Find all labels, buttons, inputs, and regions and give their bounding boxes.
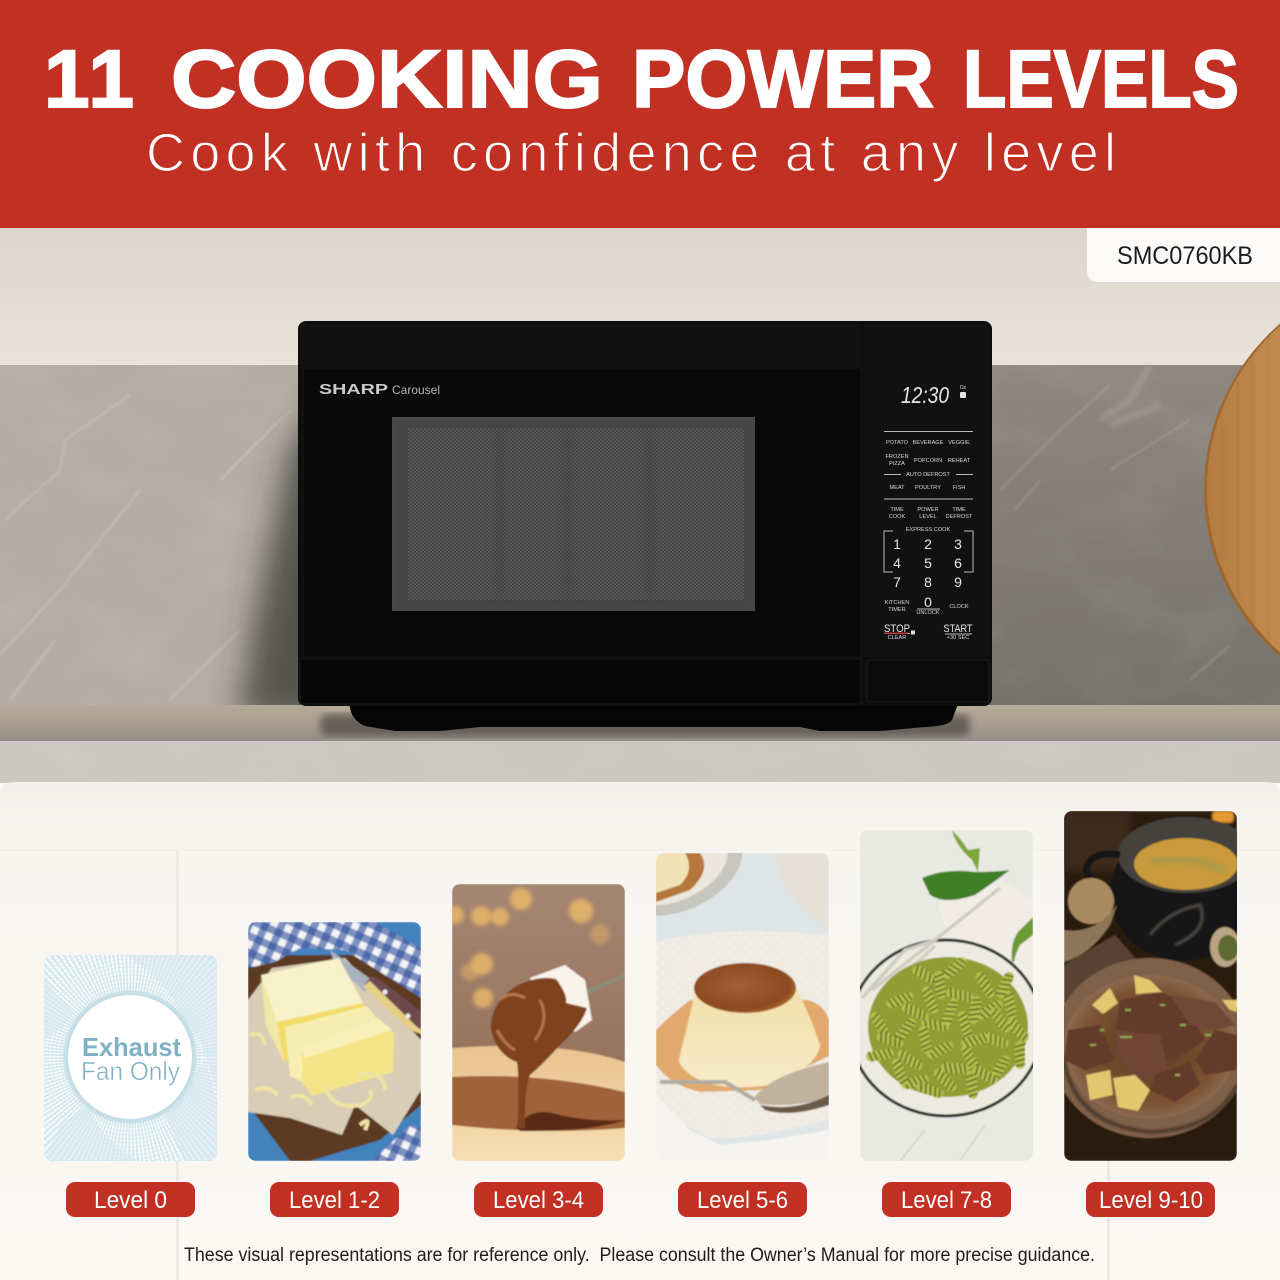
keypad labels: FISH [953, 485, 965, 491]
microwave [298, 321, 992, 731]
title: POWER [632, 34, 934, 125]
microwave shadow on counter [320, 714, 970, 736]
title: LEVELS [963, 34, 1239, 125]
keypad labels: TIMER [888, 607, 906, 613]
lock icon [911, 630, 915, 634]
white cloth [656, 1095, 829, 1161]
keypad labels: POULTRY [915, 485, 941, 491]
butter slice front [302, 1018, 394, 1096]
upper right plate [775, 853, 829, 928]
door window [392, 417, 755, 611]
title [44, 34, 1239, 125]
spoon [660, 1062, 829, 1113]
label: level 7-8 [882, 1182, 1011, 1217]
counter top surface [0, 705, 1280, 742]
flan body [679, 985, 820, 1087]
keypad labels [885, 440, 973, 641]
title: COOKING [171, 34, 603, 125]
plate rim shading [1064, 1060, 1237, 1132]
pot [1086, 817, 1254, 961]
side plate and small flan [656, 853, 742, 916]
keypad labels: FROZEN [886, 454, 908, 460]
wood board [248, 955, 421, 1161]
display indicator [960, 392, 966, 398]
express cook bracket [884, 531, 973, 572]
butter shavings [250, 1034, 385, 1130]
butter slice middle [285, 1006, 378, 1082]
SHARP logo: SHARP [319, 381, 388, 398]
number keys: 6 [954, 555, 962, 571]
number keys: 7 [893, 574, 901, 590]
keypad labels: LEVEL [919, 514, 937, 520]
gingham towel [248, 922, 421, 998]
keypad labels: POPCORN [914, 458, 942, 464]
basil leaves [922, 830, 1033, 962]
microwave shadow on backsplash [219, 396, 302, 705]
card: butter [248, 922, 421, 1161]
flame glow [1212, 811, 1234, 823]
disclaimer: These visual representations are for reference only. Please consult the Owner’s Manual for more precise guidance. [184, 1245, 1095, 1266]
top strip [300, 323, 861, 366]
number keys [893, 536, 962, 610]
brick backdrop [1064, 811, 1130, 870]
plain swirl patches [44, 955, 217, 1161]
stop underline [884, 632, 908, 634]
fork [862, 888, 1000, 998]
header banner [0, 0, 1280, 228]
start key: START [944, 623, 973, 635]
label: level 5-6 [678, 1182, 807, 1217]
exhaust label: Exhaust [82, 1032, 181, 1062]
title: 11 [44, 34, 134, 125]
microwave body [298, 321, 992, 706]
beef chunks [1064, 992, 1237, 1102]
wooden cutting board [1204, 324, 1280, 656]
plate inner [1064, 975, 1236, 1119]
label: level 1-2: Level 1-2 [289, 1187, 380, 1214]
clock display: 12:30 [901, 382, 949, 408]
number keys: 8 [924, 574, 932, 590]
keypad labels: AUTO DEFROST [906, 472, 950, 478]
keypad labels: EXPRESS COOK [906, 527, 950, 533]
circle shadow [60, 987, 200, 1127]
label: level 9-10 [1086, 1182, 1215, 1217]
parchment paper [248, 958, 421, 1135]
keypad labels: VEGGIE [948, 440, 970, 446]
keypad labels: TIME [890, 507, 904, 513]
number keys: 2 [924, 536, 932, 552]
white circle [68, 995, 192, 1119]
keypad labels: PIZZA [889, 461, 905, 467]
model number: SMC0760KB [1117, 242, 1253, 270]
number keys: 0 [924, 594, 932, 610]
napkin [938, 880, 1033, 1000]
keypad labels: BEVERAGE [913, 440, 944, 446]
card: beef stew [1052, 811, 1254, 1161]
keypad labels: UNLOCK [916, 610, 940, 616]
number keys: 9 [954, 574, 962, 590]
marble veins [900, 1125, 985, 1161]
label: level 1-2 [270, 1182, 399, 1217]
keypad labels: REHEAT [948, 458, 971, 464]
control panel: Oz [960, 385, 967, 391]
stew plate [1052, 958, 1248, 1138]
keypad labels: MEAT [889, 485, 905, 491]
label: level 5-6: Level 5-6 [697, 1187, 788, 1214]
melted chocolate pool [452, 1076, 625, 1131]
herb flecks [1090, 1005, 1211, 1075]
number keys: 3 [954, 536, 962, 552]
butter block back [261, 958, 365, 1062]
label: level 7-8: Level 7-8 [901, 1187, 992, 1214]
door [303, 368, 861, 657]
keypad labels: CLOCK [949, 604, 969, 610]
caramel top [694, 963, 796, 1013]
label: level 0 [66, 1182, 195, 1217]
keypad labels: CLEAR [888, 635, 906, 641]
chocolate coated blob and drip [491, 978, 587, 1128]
keypad labels: DEFROST [946, 514, 973, 520]
lace plate [656, 931, 829, 1138]
potato chunks [1086, 975, 1237, 1111]
bottom panel [0, 782, 1280, 1280]
steam [1150, 905, 1202, 945]
stop key: STOP [884, 623, 910, 635]
keypad labels: TIME [952, 507, 966, 513]
wood table [1064, 935, 1150, 1010]
keypad labels: POWER [917, 507, 939, 513]
subtitle: Cook with confidence at any level [146, 123, 1116, 183]
feet / base [349, 704, 958, 731]
bokeh lights [446, 888, 610, 1008]
pasta mound [865, 955, 1031, 1099]
marble backsplash [0, 365, 1280, 706]
label: level 9-10: Level 9-10 [1099, 1187, 1203, 1214]
mushroom dish [1064, 905, 1117, 962]
skewer [588, 975, 625, 992]
wall [0, 227, 1280, 366]
small herb dish [1210, 927, 1240, 967]
keypad labels: +30 SEC [947, 635, 969, 641]
bowl [850, 940, 1042, 1116]
chocolate swirl [516, 1112, 625, 1131]
bowl [452, 1046, 625, 1161]
keypad labels: COOK [889, 514, 905, 520]
keypad labels: KITCHEN [885, 600, 909, 606]
label: level 3-4: Level 3-4 [493, 1187, 584, 1214]
number keys: 5 [924, 555, 932, 571]
chocolate highlight [497, 994, 544, 1050]
label: level 3-4 [474, 1182, 603, 1217]
herb bowl interior [1218, 935, 1238, 961]
knife [330, 950, 421, 1034]
counter front edge [0, 741, 1280, 783]
Carousel logo: Carousel [392, 383, 440, 397]
towel corner [372, 1125, 421, 1161]
card: exhaust fan only [44, 955, 217, 1161]
mushroom [1068, 878, 1114, 924]
model tag [1087, 227, 1280, 282]
card: pesto pasta [850, 830, 1042, 1161]
door bottom handle strip [300, 659, 861, 704]
marshmallow [530, 965, 592, 1032]
label: level 0: Level 0 [94, 1187, 167, 1214]
control panel [863, 323, 990, 702]
card: flan [656, 853, 829, 1146]
number keys: 1 [893, 536, 901, 552]
card: melted chocolate [446, 884, 625, 1161]
number keys: 4 [893, 555, 901, 571]
keypad labels: POTATO [886, 440, 909, 446]
caramel sauce [656, 1000, 829, 1092]
kitchen background scene [0, 227, 1280, 783]
radial halftone rays [44, 955, 217, 1161]
fan only label: Fan Only [81, 1056, 180, 1086]
